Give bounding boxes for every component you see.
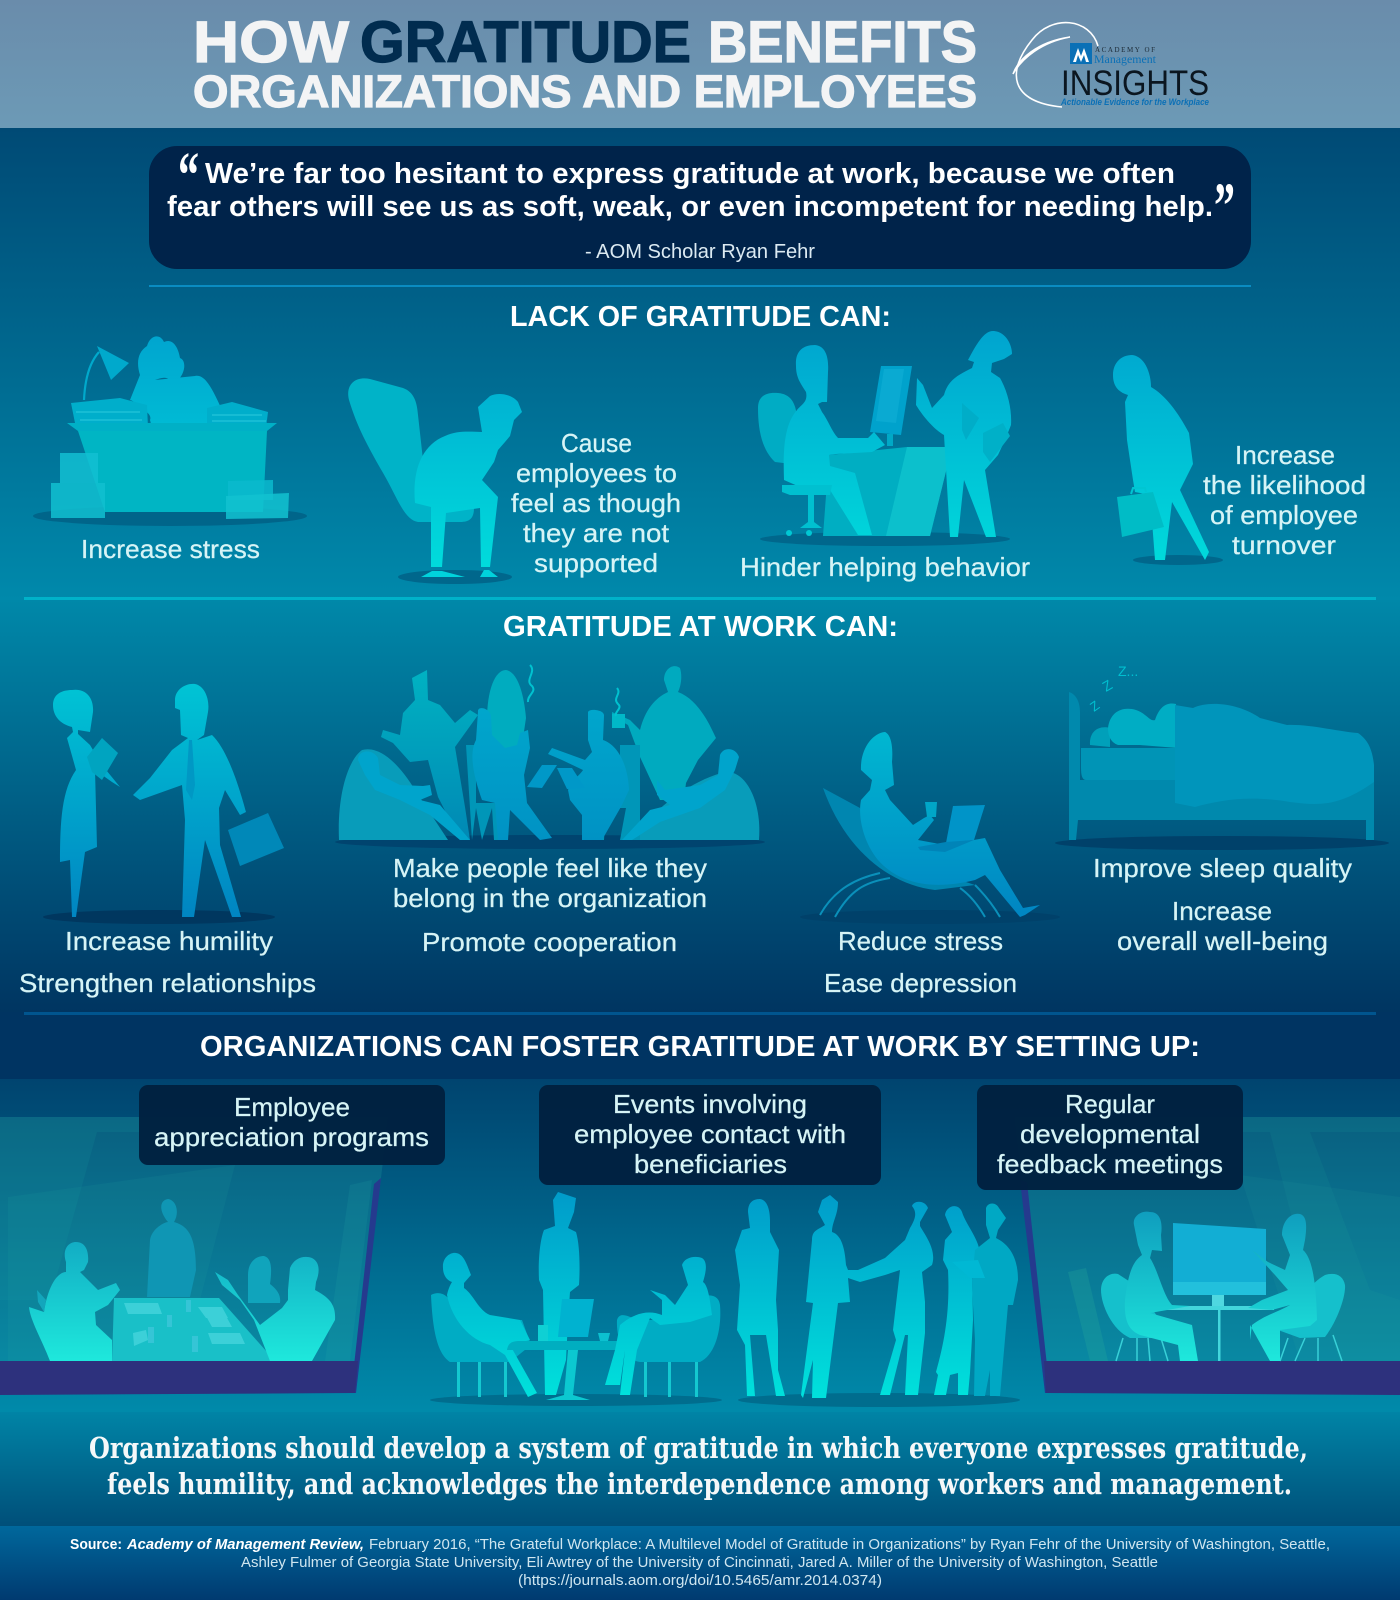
source footer: Academy of Management Review, xyxy=(126,1537,364,1553)
label: increase humility, strengthen relationships xyxy=(19,926,316,998)
panel: events with beneficiaries: Events involving xyxy=(613,1089,807,1119)
label: sleep quality, well-being: Improve sleep quality xyxy=(1093,853,1352,883)
title xyxy=(193,10,977,117)
panel: quote: We’re far too hesitant to express gratitude at work, because we often xyxy=(205,158,1175,190)
label: belong, promote cooperation: belong in the organization xyxy=(393,883,707,913)
logo: Academy of Management Insights: ACADEMY OF xyxy=(1095,46,1155,54)
label: belong, promote cooperation: Promote cooperation xyxy=(422,927,677,957)
label: sleep quality, well-being: overall well-being xyxy=(1117,926,1328,956)
heading: foster gratitude: ORGANIZATIONS CAN FOSTER GRATITUDE AT WORK BY SETTING UP: xyxy=(200,1031,1200,1063)
scene: feedback meeting behind glass xyxy=(1014,1117,1400,1395)
label: increase humility, strengthen relationships: Increase humility xyxy=(65,926,273,956)
icon: person sleeping in bed: Z... xyxy=(1118,663,1138,679)
label: not supported: feel as though xyxy=(511,488,681,518)
panel: quote: ” xyxy=(1214,170,1235,243)
label: not supported xyxy=(511,428,681,578)
label: turnover: turnover xyxy=(1232,530,1336,560)
panel: quote: fear others will see us as soft, weak, or even incompetent for needing help. xyxy=(167,191,1213,223)
title: ORGANIZATIONS AND EMPLOYEES xyxy=(193,66,977,117)
title: BENEFITS xyxy=(708,10,977,75)
label: increase stress: Increase stress xyxy=(81,534,260,564)
label: turnover: Increase xyxy=(1235,440,1335,470)
panel: developmental feedback meetings: Regular xyxy=(1065,1089,1155,1119)
panel: quote xyxy=(149,139,1251,269)
scene: employees meeting beneficiaries, seated xyxy=(430,1192,722,1406)
label: sleep quality, well-being xyxy=(1093,853,1352,956)
conclusion text xyxy=(89,1431,1308,1501)
label: belong, promote cooperation: Make people feel like they xyxy=(393,853,707,883)
title: GRATITUDE xyxy=(360,10,691,75)
panel: events with beneficiaries xyxy=(539,1085,881,1185)
label: not supported: Cause xyxy=(561,428,632,458)
panel: events with beneficiaries: beneficiaries xyxy=(634,1149,787,1179)
label: turnover: of employee xyxy=(1210,500,1358,530)
icon: woman and man shaking hands xyxy=(43,684,284,924)
logo: Academy of Management Insights: INSIGHTS xyxy=(1061,64,1209,103)
icon: coworkers in lounge xyxy=(335,665,765,849)
label: not supported: employees to xyxy=(516,458,677,488)
panel: developmental feedback meetings: developmental xyxy=(1020,1119,1200,1149)
scene: standing group shaking hands xyxy=(735,1195,1020,1407)
source footer xyxy=(70,1537,1330,1589)
panel: developmental feedback meetings: feedback meetings xyxy=(997,1149,1223,1179)
label: not supported: they are not xyxy=(523,518,670,548)
panel: employee appreciation programs xyxy=(139,1085,445,1165)
heading: lack of gratitude: LACK OF GRATITUDE CAN: xyxy=(510,301,891,333)
icon: two men at desk xyxy=(758,331,1012,546)
icon: person sleeping in bed xyxy=(1055,663,1389,850)
icon: unsupported man in chair xyxy=(348,378,522,584)
title: HOW xyxy=(193,10,349,75)
source footer: February 2016, “The Grateful Workplace: A Multilevel Model of Gratitude in Organizations” by Ryan Fehr of the University of Washington, Seattle, xyxy=(369,1537,1330,1553)
source footer: (https://journals.aom.org/doi/10.5465/amr.2014.0374) xyxy=(518,1573,882,1589)
source footer: Ashley Fulmer of Georgia State University, Eli Awtrey of the University of Cincinnati, Jared A. Miller of the University of Washington, Seattle xyxy=(241,1555,1158,1571)
icon: stressed worker at desk xyxy=(33,336,307,526)
label: belong, promote cooperation xyxy=(393,853,707,957)
label: reduce stress, ease depression: Ease depression xyxy=(824,968,1017,998)
label: hinder helping behavior: Hinder helping behavior xyxy=(740,552,1030,582)
panel: quote: - AOM Scholar Ryan Fehr xyxy=(585,241,815,263)
logo: Academy of Management Insights: Actionable Evidence for the Workplace xyxy=(1060,97,1209,107)
icon: man relaxing in lounge chair xyxy=(800,732,1060,924)
label: reduce stress, ease depression: Reduce stress xyxy=(838,926,1003,956)
label: sleep quality, well-being: Increase xyxy=(1172,896,1272,926)
label: reduce stress, ease depression xyxy=(824,926,1017,998)
icon: person sleeping in bed: Z xyxy=(1087,698,1102,714)
panel: employee appreciation programs: Employee xyxy=(234,1092,350,1122)
logo: Academy of Management Insights xyxy=(1013,23,1209,107)
label: increase humility, strengthen relationships: Strengthen relationships xyxy=(19,968,316,998)
panel: employee appreciation programs: appreciation programs xyxy=(154,1122,429,1152)
scene: meeting room behind glass xyxy=(0,1117,388,1395)
panel: developmental feedback meetings xyxy=(977,1085,1243,1190)
panel: quote: “ xyxy=(178,139,199,212)
label: turnover: the likelihood xyxy=(1203,470,1366,500)
heading: gratitude at work: GRATITUDE AT WORK CAN: xyxy=(503,611,898,643)
source footer: Source: xyxy=(70,1537,122,1553)
label: turnover xyxy=(1203,440,1366,560)
logo: Academy of Management Insights: Management xyxy=(1094,52,1157,66)
panel: events with beneficiaries: employee contact with xyxy=(574,1119,846,1149)
icon: man leaving with briefcase xyxy=(1113,355,1223,565)
label: not supported: supported xyxy=(534,548,658,578)
icon: person sleeping in bed: Z xyxy=(1100,676,1115,695)
